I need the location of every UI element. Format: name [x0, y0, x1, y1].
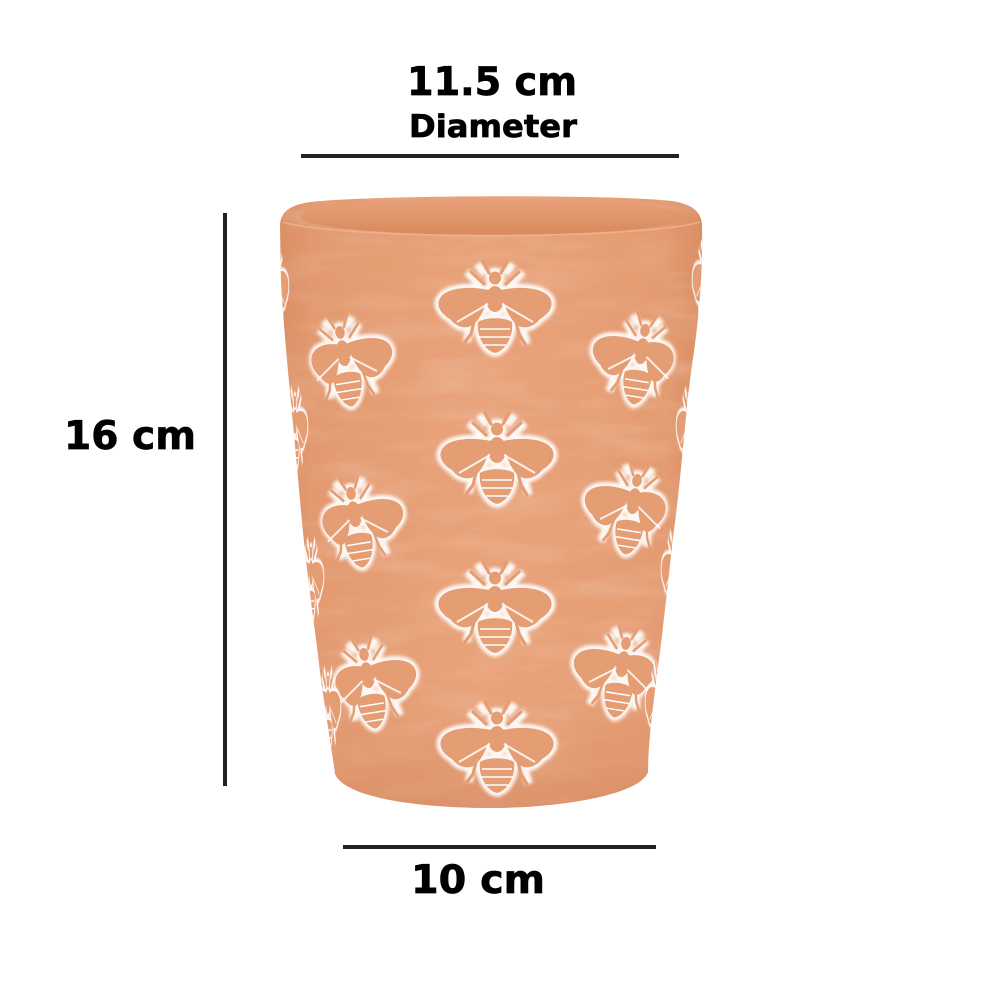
height dimension line — [223, 213, 227, 786]
edge bees — [264, 239, 717, 753]
left side bees — [305, 309, 424, 734]
pot — [264, 190, 717, 815]
top diameter label: Diameter — [409, 109, 578, 145]
rim interior — [300, 199, 686, 235]
top diameter label — [407, 60, 578, 145]
bottom dimension line — [343, 845, 656, 849]
base label: 10 cm — [411, 858, 545, 903]
top dimension line — [301, 154, 679, 158]
top diameter label: 11.5 cm — [407, 60, 577, 105]
pot body — [264, 190, 717, 815]
front bees — [438, 262, 554, 793]
height label: 16 cm — [64, 414, 196, 459]
right side bees — [566, 307, 680, 723]
